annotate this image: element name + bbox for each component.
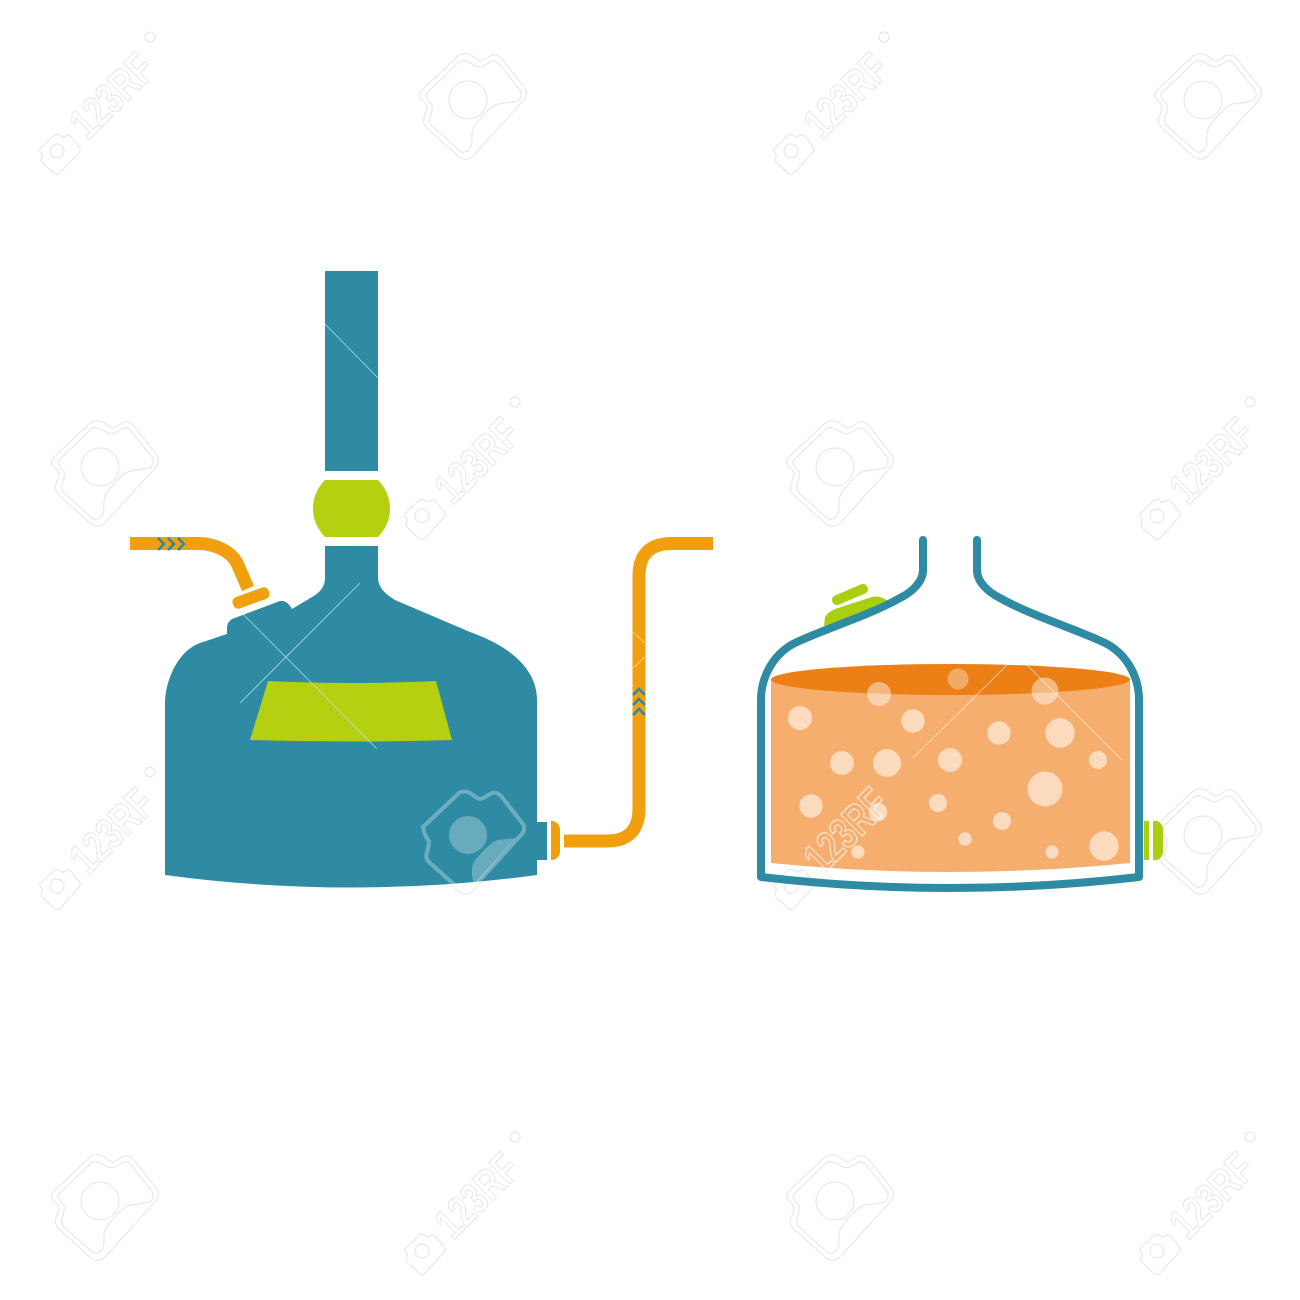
watermark: 123RF middle left — [405, 397, 529, 540]
watermark: egg logo 8 — [787, 1155, 893, 1260]
egg yolk on kettle — [449, 816, 487, 854]
watermark overlay on kettle: translucent egg logo — [423, 792, 524, 891]
watermark: egg logo 1 — [420, 54, 526, 159]
liquid body — [771, 679, 1130, 872]
watermark: egg logo 7 — [52, 1155, 158, 1260]
connecting pipe tube — [564, 544, 713, 841]
watermark diagonals: thin lines crossing the artwork — [240, 323, 1122, 760]
orange inlet flange — [231, 586, 271, 610]
outlet stub on kettle — [536, 822, 547, 860]
green collar on stack — [313, 480, 390, 537]
watermark: egg logo 5 — [420, 789, 526, 894]
bubbles — [788, 668, 1119, 861]
green hatch base — [824, 596, 888, 626]
flow chevrons pointing right — [158, 538, 184, 550]
watermark: 123RF bottom left: 123RF — [425, 1144, 529, 1248]
watermark: egg logo 3 — [52, 421, 158, 526]
kettle body — [165, 546, 537, 888]
green label panel on kettle — [250, 681, 452, 742]
right vessel: outlined tank with liquid — [761, 540, 1163, 888]
inlet pipe tube — [130, 544, 248, 588]
123RF pale text on liquid: 123RF — [794, 779, 898, 883]
watermark: 123RF lower centre: 123RF — [794, 779, 898, 883]
liquid surface — [771, 664, 1130, 695]
watermark: 123RF lower left — [40, 767, 164, 910]
green hatch lid — [831, 582, 869, 607]
watermark: 123RF bottom left — [405, 1132, 529, 1275]
watermark: 123RF middle right: 123RF — [1160, 409, 1264, 513]
egg ring on kettle — [423, 792, 524, 891]
watermark: 123RF top centre: 123RF — [794, 44, 898, 148]
flow chevrons pointing up — [633, 689, 645, 715]
tank outline — [761, 540, 1139, 888]
inlet pipe: orange with flow chevrons — [130, 538, 248, 588]
watermark: 123RF lower centre — [774, 767, 898, 910]
watermark: 123RF top centre — [774, 32, 898, 175]
watermark: egg logo 6 — [1155, 789, 1261, 894]
stack: vertical chimney — [325, 271, 378, 471]
connecting pipe: orange with flow chevrons — [564, 544, 713, 841]
watermark: egg logo 4 — [787, 421, 893, 526]
watermark: 123RF middle right — [1140, 397, 1264, 540]
watermark: egg logo 2 — [1155, 54, 1261, 159]
watermark: 123RF lower left: 123RF — [60, 779, 164, 883]
watermark: 123RF middle left: 123RF — [425, 409, 529, 513]
watermark: 123RF bottom right — [1140, 1132, 1264, 1275]
egg white on kettle — [472, 838, 516, 883]
watermark: 123RF top left: 123RF — [60, 44, 164, 148]
watermark: 123RF top left — [40, 32, 164, 175]
watermark: 123RF bottom right: 123RF — [1160, 1144, 1264, 1248]
orange outlet flange — [551, 821, 560, 860]
left vessel: solid teal kettle — [165, 271, 560, 888]
green side valve — [1144, 821, 1163, 860]
